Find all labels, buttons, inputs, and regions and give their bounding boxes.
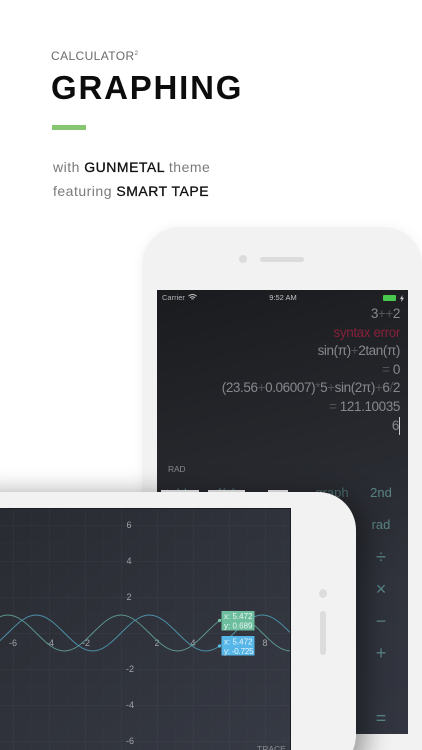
portrait phone [142,227,422,750]
x axis labels: -2 [82,638,90,648]
x axis labels: -6 [9,638,17,648]
y axis labels: 6 [126,520,132,530]
trace label green [222,611,254,630]
x axis labels [9,638,268,648]
key highlight strip 3 [268,490,288,492]
y axis labels: 4 [126,556,132,566]
icon: battery [383,295,396,301]
y axis labels: 2 [126,592,132,602]
tape: current input with cursor: 6 [392,418,399,433]
tape: result 0: = 0 [382,362,400,377]
camera dot [239,255,247,263]
x axis labels: 4 [190,638,196,648]
icon: wifi [188,294,197,300]
tape: expression 3: (23.56+0.06007)*5+sin(2π)+6/2 [222,380,400,395]
key: graph: graph [315,485,349,500]
key: multiply: × [376,579,386,599]
subtitle line 2: featuring SMART TAPE [53,183,209,199]
tape: syntax error: syntax error [334,325,400,340]
status bar carrier: Carrier [162,293,185,302]
landscape phone [0,492,356,750]
icon: charging bolt [400,295,404,302]
y axis labels: -2 [126,664,134,674]
key: 2nd: 2nd [370,485,392,500]
key: f(x): f(x) [218,486,236,501]
speaker [260,257,304,262]
green accent bar [52,125,86,130]
trace marker blue [218,644,221,648]
tape: expression 1: 3++2 [371,306,400,321]
trace label blue [222,636,254,656]
screen right edge [290,508,291,750]
title: graphing: GRAPHING [51,69,243,106]
y axis labels [126,520,134,746]
trace label blue: y: -0.725 [224,647,254,656]
mode label RAD: RAD [168,464,185,474]
camera dot [319,589,327,598]
trace label green: y: 0.689 [224,622,253,630]
key: minus: − [376,611,386,631]
trace label green: x: 5.472 [224,612,253,621]
key: rad: rad [372,517,390,532]
x axis labels: -4 [46,638,54,648]
subtitle line 1: with GUNMETAL theme [53,159,210,175]
y axis labels: -6 [126,736,134,746]
key: divide: ÷ [376,547,386,567]
y axis labels: -4 [126,700,134,710]
calculator screen [157,290,408,734]
graph screen [0,508,291,750]
tape: result 121.10035: = 121.10035 [329,399,400,414]
eyebrow: calculator squared: CALCULATOR2 [51,49,138,63]
trace marker green [218,619,221,622]
key highlight strip 2 [208,490,245,492]
heading block [51,49,243,199]
x axis labels: 2 [154,638,160,648]
key highlight strip 1 [161,490,199,492]
tape: expression 2: sin(π)+2tan(π) [318,343,400,358]
x axis labels: 8 [262,638,268,648]
trace label blue: x: 5.472 [224,638,253,646]
key: table: table [166,486,194,501]
key: plus: + [376,643,386,663]
speaker [320,611,326,655]
key: equals: = [376,708,386,728]
status bar time: 9:52 AM [269,293,297,302]
sine curve [0,615,319,651]
cosine curve [0,615,291,651]
